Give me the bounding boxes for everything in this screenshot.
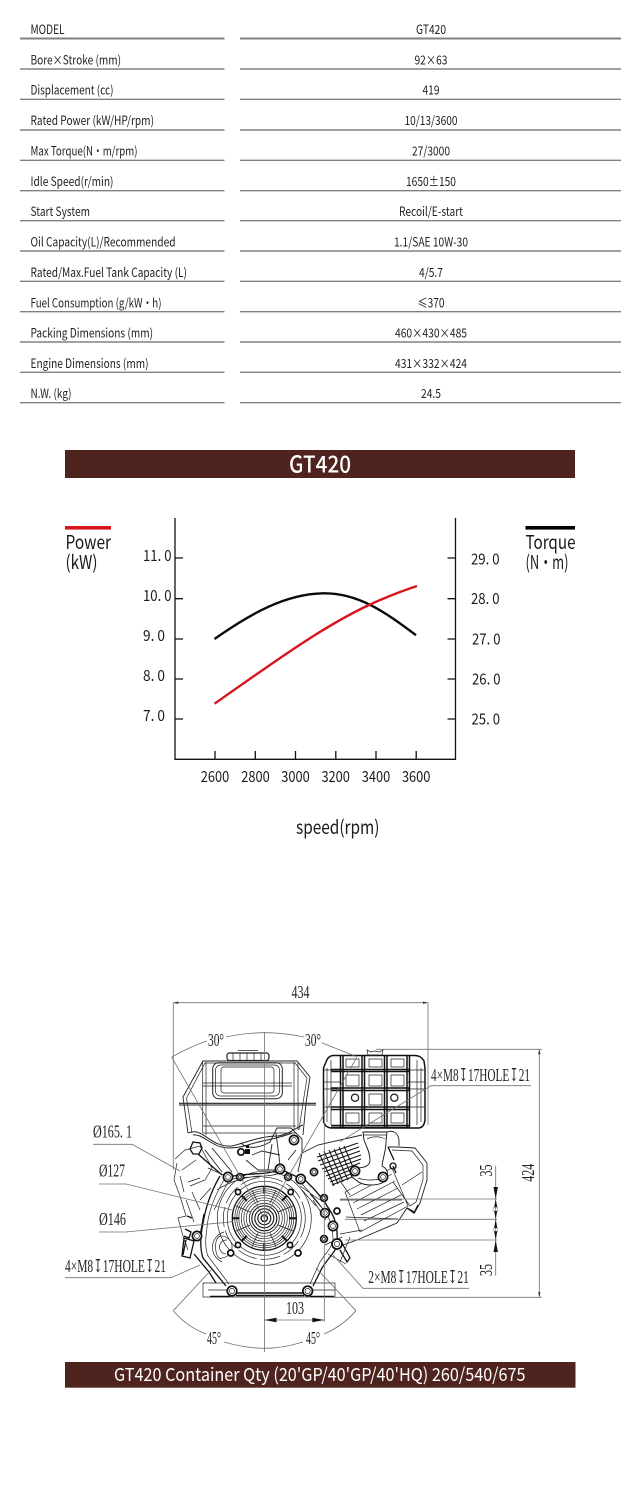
curve: torque: [214, 593, 416, 639]
row: fuel consumption: Fuel Consumption (g/kW·h): [30, 292, 162, 312]
dimension: height 424: 424: [518, 1164, 538, 1182]
row: oil capacity: 1.1/SAE 10W-30: [394, 232, 468, 250]
left axis labels: power: 7. 0: [143, 705, 165, 726]
bolts: crankcase fasteners: [192, 1135, 388, 1296]
row: oil capacity: [20, 232, 621, 251]
callout: lower right mounting holes: [333, 1255, 469, 1288]
legend: power: [65, 526, 112, 575]
chart axes and ticks: [175, 518, 456, 759]
legend: power: (kW): [66, 548, 98, 575]
row: idle speed: 1650±150: [406, 171, 456, 190]
row: net weight: N.W. (kg): [30, 383, 72, 402]
row: max torque: [20, 140, 621, 160]
callout: diameter 165.1: Ø165. 1: [93, 1122, 132, 1142]
x axis labels: rpm: 3400: [362, 766, 390, 787]
row: start system: Start System: [30, 201, 90, 220]
row: start system: [20, 201, 621, 221]
row: packing dimensions: [20, 322, 621, 342]
dimension: 45 degree angles: [173, 1268, 356, 1348]
callout: upper right mounting holes: 4×M8↧17HOLE↧21: [431, 1065, 530, 1085]
icon: flywheel: [232, 1186, 296, 1250]
callout: diameter 146: Ø146: [99, 1209, 126, 1229]
row: model: [20, 19, 621, 38]
x axis labels: rpm: 3600: [402, 766, 430, 787]
x axis labels: rpm: 3200: [321, 766, 350, 787]
x axis labels: rpm: 2800: [241, 766, 270, 787]
technical drawing: engine with dimensions: [65, 982, 542, 1352]
dimension: overall width 434: [173, 982, 428, 1170]
right axis labels: torque: 25. 0: [472, 708, 500, 730]
right axis labels: torque: 26. 0: [472, 668, 500, 690]
dimension: 30 degree angles: [172, 1030, 357, 1218]
left axis labels: power: 11. 0: [143, 545, 172, 566]
heading: GT420 banner: GT420: [289, 446, 351, 480]
x axis labels: rpm: [201, 766, 430, 787]
left axis labels: power: 9. 0: [143, 625, 165, 646]
icon: cylinder and head: [302, 1131, 427, 1264]
row: model: MODEL: [30, 19, 65, 38]
dimension: height 424: [330, 1049, 542, 1297]
callout: lower right mounting holes: 2×M8↧17HOLE↧21: [368, 1267, 469, 1287]
row: rated power: 10/13/3600: [404, 110, 458, 129]
callout: diameter 127: Ø127: [99, 1160, 125, 1180]
legend: power: Power: [66, 528, 112, 555]
callout: diameter 146: [99, 1209, 233, 1232]
callout: diameter 165.1: [93, 1122, 180, 1171]
dimension: 45 degree angles: 45°: [306, 1328, 320, 1348]
left axis labels: power: [143, 545, 172, 726]
icon: air filter: [324, 1050, 425, 1128]
row: model: GT420: [416, 19, 446, 38]
row: bore and stroke: Bore×Stroke (mm): [30, 50, 121, 68]
panel: specification table: [20, 19, 621, 403]
row: engine dimensions: Engine Dimensions (mm): [30, 353, 148, 372]
row: packing dimensions: Packing Dimensions (mm): [30, 322, 153, 342]
callout: upper right mounting holes: [340, 1065, 531, 1142]
right axis labels: torque: [471, 548, 500, 730]
icon: crankcase: [174, 1128, 337, 1297]
callout: diameter 127: [99, 1160, 232, 1210]
left axis labels: power: 8. 0: [143, 665, 165, 686]
row: bore and stroke: [20, 50, 621, 69]
dimension: 35 mm spacings: [340, 1164, 498, 1276]
row: idle speed: [20, 171, 621, 191]
row: fuel consumption: ≤370: [418, 292, 445, 312]
row: fuel tank capacity: Rated/Max.Fuel Tank Capacity (L): [30, 262, 187, 281]
row: rated power: Rated Power (kW/HP/rpm): [30, 110, 154, 129]
left axis labels: power: 10. 0: [143, 585, 172, 606]
row: idle speed: Idle Speed(r/min): [30, 171, 114, 190]
row: max torque: 27/3000: [412, 140, 450, 160]
dimension: 35 mm spacings: 35: [476, 1164, 496, 1176]
row: displacement: [20, 80, 621, 99]
legend: torque: [526, 526, 576, 575]
row: fuel tank capacity: [20, 262, 621, 281]
x axis labels: rpm: 2600: [201, 766, 229, 787]
dimension: bolt spacing 103: [264, 1100, 324, 1322]
row: fuel tank capacity: 4/5.7: [419, 262, 443, 281]
dimension: bolt spacing 103: 103: [286, 1298, 304, 1318]
row: packing dimensions: 460×430×485: [395, 322, 467, 342]
row: net weight: 24.5: [421, 383, 441, 402]
row: net weight: [20, 383, 621, 403]
row: start system: Recoil/E-start: [399, 201, 463, 220]
legend: torque: Torque: [526, 528, 576, 555]
row: max torque: Max Torque(N·m/rpm): [30, 140, 138, 160]
curve: power: [214, 586, 417, 704]
chart: power and torque curves: [65, 518, 576, 840]
legend: torque: (N·m): [526, 548, 568, 575]
right axis labels: torque: 28. 0: [471, 588, 500, 609]
row: displacement: 419: [422, 80, 440, 98]
heading: GT420 banner: [65, 446, 575, 480]
right axis labels: torque: 27. 0: [472, 628, 500, 650]
x axis labels: rpm: 3000: [281, 766, 310, 787]
dimension: 45 degree angles: 45°: [207, 1328, 221, 1348]
right axis labels: torque: 29. 0: [471, 548, 500, 570]
footer banner: container quantity: GT420 Container Qty (20'GP/40'GP/40'HQ) 260/540/675: [114, 1361, 526, 1387]
axis title: speed: speed(rpm): [296, 813, 380, 840]
callout: left mounting holes: 4×M8↧17HOLE↧21: [65, 1256, 166, 1276]
row: oil capacity: Oil Capacity(L)/Recommended: [30, 232, 176, 250]
dimension: centre line: [264, 1032, 266, 1352]
row: engine dimensions: [20, 353, 621, 372]
dimension: 30 degree angles: 30°: [305, 1030, 321, 1050]
dimension: overall width 434: 434: [292, 982, 310, 1002]
row: bore and stroke: 92×63: [414, 50, 448, 68]
dimension: 35 mm spacings: 35: [476, 1264, 496, 1276]
row: rated power: [20, 110, 621, 130]
icon: fuel tank: [179, 1050, 316, 1148]
row: engine dimensions: 431×332×424: [395, 353, 467, 372]
dimension: 30 degree angles: 30°: [208, 1030, 224, 1050]
row: fuel consumption: [20, 292, 621, 312]
row: displacement: Displacement (cc): [30, 80, 114, 98]
